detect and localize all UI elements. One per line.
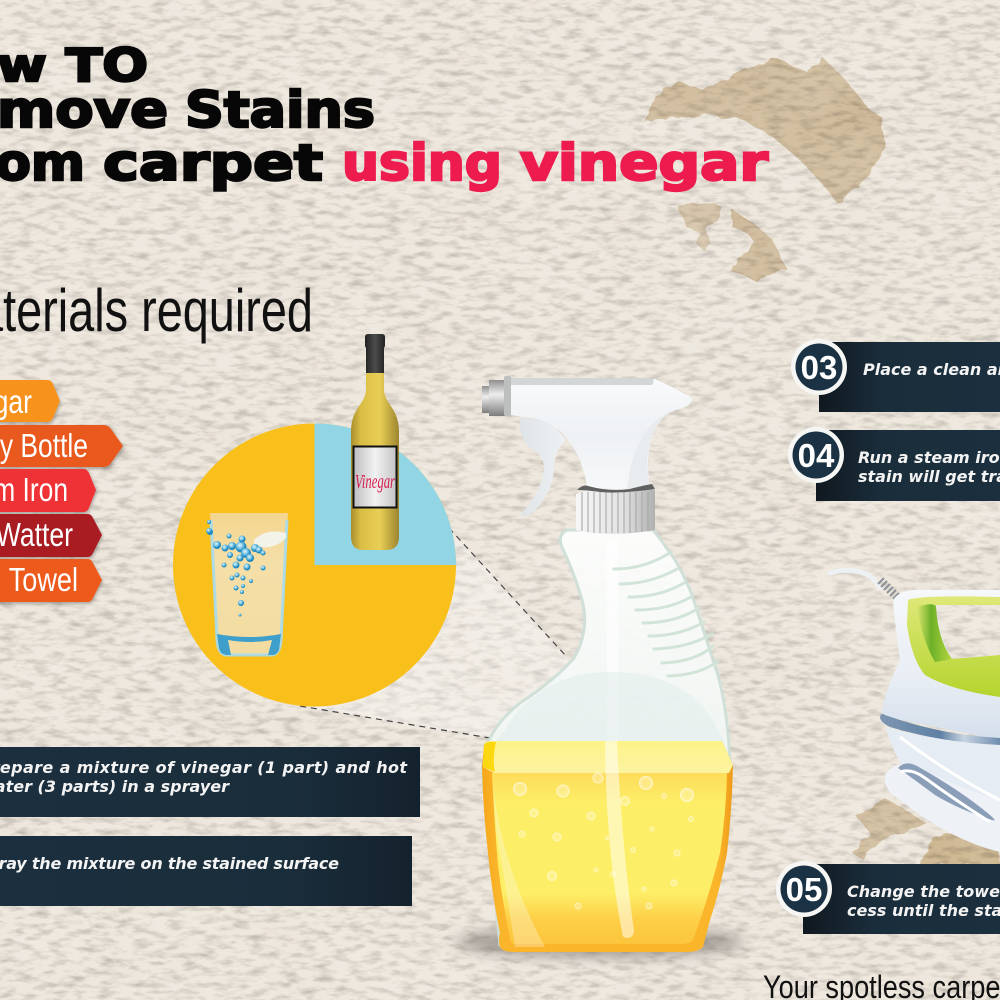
step 5 panel (776, 861, 1000, 934)
zoom beam from pie to bottle (300, 528, 585, 738)
collar shadow (577, 484, 655, 493)
materials list (0, 380, 123, 602)
shoulder highlight (495, 672, 724, 741)
icon: vinegar bottle (351, 334, 399, 550)
sprayer head (510, 379, 692, 489)
step 3 badge (791, 339, 847, 395)
stain: small right crescent (730, 210, 786, 282)
nozzle (482, 376, 511, 416)
stain: small left droplet (678, 203, 720, 250)
step 2 panel (0, 836, 412, 906)
collar (576, 487, 655, 534)
step 4 panel (788, 427, 1000, 501)
step 3 badge: 03 (801, 349, 837, 386)
stain: top right large (645, 58, 885, 203)
grip ribs (614, 552, 718, 676)
cord spring (878, 578, 899, 599)
bottle body (482, 530, 730, 945)
stain: under iron right (920, 833, 1000, 866)
icon: glass of water (206, 513, 288, 655)
steam iron (830, 570, 1000, 852)
stain: under iron left (852, 797, 927, 860)
pie chart: 1 part vinegar, 3 parts water (173, 424, 456, 706)
trigger (520, 418, 566, 516)
iron handle (907, 596, 1000, 697)
iron soleplate (885, 763, 1000, 852)
iron band (880, 714, 1000, 746)
step 3 panel (791, 339, 1000, 412)
iron upper skirt (886, 727, 1000, 815)
bottle label text: Vinegar (355, 471, 395, 493)
cord (830, 570, 880, 588)
step 4 badge: 04 (798, 437, 835, 474)
step 5 badge: 05 (786, 871, 822, 908)
iron body (881, 590, 1000, 740)
liquid (482, 741, 733, 952)
title (0, 39, 768, 192)
step 1 panel (0, 747, 420, 817)
floor shadow (455, 927, 745, 957)
spray bottle (455, 376, 745, 957)
step 5 badge (776, 861, 832, 917)
vertical highlight (607, 540, 618, 741)
title line 3b: carpet (103, 134, 323, 192)
title line 2b: Stains (185, 81, 375, 139)
liquid bubbles (513, 772, 694, 910)
title highlight 1: using (342, 134, 502, 192)
title highlight 2: vinegar (520, 134, 768, 192)
step 4 badge (788, 427, 844, 483)
dip tube (605, 741, 634, 938)
